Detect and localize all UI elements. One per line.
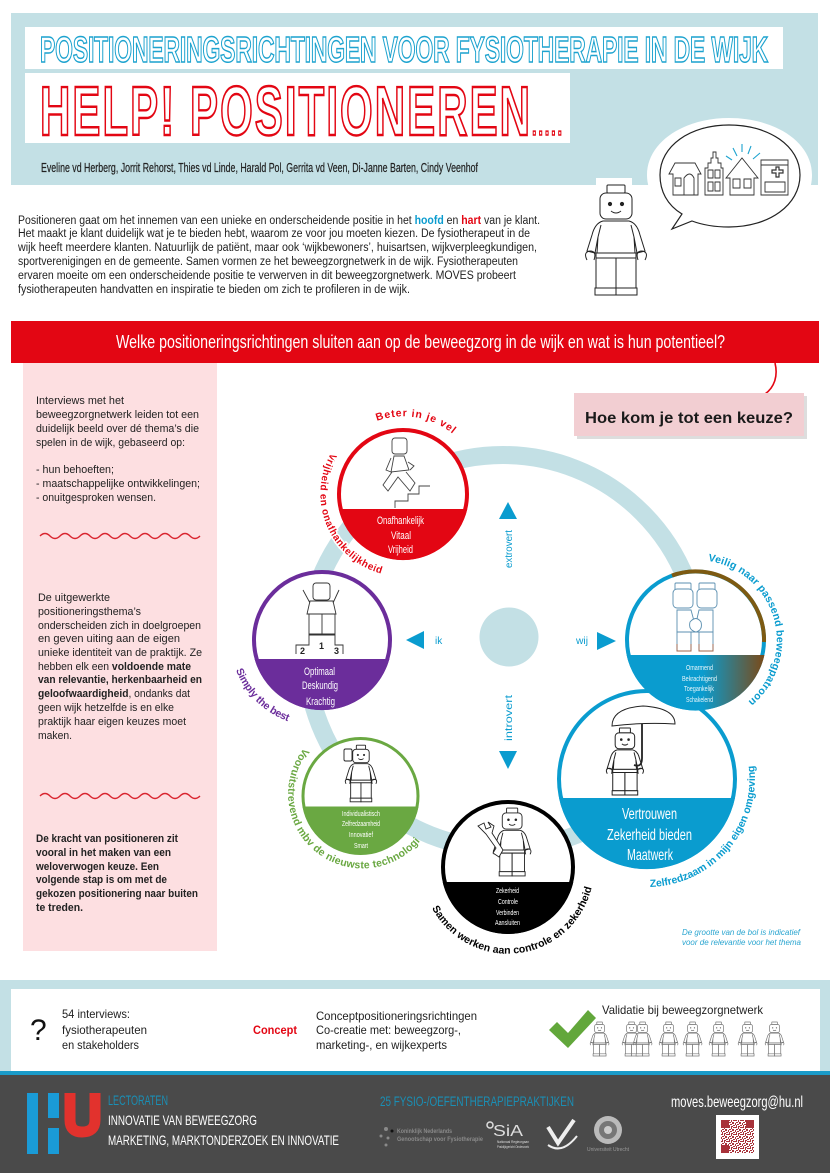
speech bubble with houses xyxy=(647,118,812,236)
header band xyxy=(11,13,818,185)
arrow: ik xyxy=(406,631,443,649)
text block: themes xyxy=(38,592,202,742)
theme circle: zelfredzaam: Maatwerk xyxy=(627,847,674,864)
text block: interviews: - hun behoeften; xyxy=(36,464,114,476)
lectoraten: MARKETING, MARKTONDERZOEK EN INNOVATIE xyxy=(108,1132,339,1148)
panel: left text xyxy=(23,363,217,951)
icon: figure on podium: 3 xyxy=(334,646,339,656)
text block: conclusion xyxy=(35,833,198,914)
theme circle: samen werken xyxy=(432,800,592,954)
theme circle: vooruitstrevend: Innovatief xyxy=(349,832,373,839)
text block: themes: onderscheiden zich in doelgroepen xyxy=(38,620,201,632)
logo: SIA: Nationaal Regieorgaan xyxy=(497,1139,529,1144)
theme circle: samen werken: Samen werken aan controle en zekerheid xyxy=(432,886,592,954)
logo: KNGF xyxy=(380,1127,484,1146)
theme circle: samen werken: Verbinden xyxy=(496,910,519,917)
theme circle: veilig: Omarmend xyxy=(686,665,713,672)
theme circle: samen werken: Controle xyxy=(498,899,518,906)
arrow: introvert xyxy=(499,695,517,769)
icon: figure with wrench xyxy=(478,808,531,876)
text block: themes: geloofwaardigheid, ondanks dat xyxy=(38,688,190,700)
icon: figure on podium xyxy=(296,583,343,656)
text block: themes: hebben elk een voldoende mate xyxy=(38,661,191,673)
partners xyxy=(380,1093,630,1153)
QR code xyxy=(716,1115,759,1159)
text block: themes: praktijk haar eigen keuzes moet xyxy=(38,716,186,728)
note: size legend: voor de relevantie voor het thema xyxy=(682,938,802,947)
theme circle: beter in je vel: Onafhankelijk xyxy=(377,515,424,527)
theme circle: simply the best xyxy=(236,570,392,722)
theme circle: zelfredzaam: Zelfredzaam in mijn eigen omgeving xyxy=(650,766,757,887)
step: concept: Co-creatie met: beweegzorg-, xyxy=(316,1023,461,1037)
arrow: ik: ik xyxy=(435,636,443,647)
icon: two figures xyxy=(673,583,717,651)
logo: UU xyxy=(587,1116,630,1153)
theme circle: zelfredzaam: Vertrouwen xyxy=(622,806,677,823)
text block: conclusion: volgende stap is om met de xyxy=(36,874,167,886)
theme circle: vooruitstrevend: Smart xyxy=(354,843,368,850)
step: interviews xyxy=(30,1007,147,1052)
text block: conclusion: De kracht van positioneren zit xyxy=(36,833,178,845)
logo: UU: Universiteit Utrecht xyxy=(587,1147,630,1153)
lectoraten: LECTORATEN xyxy=(108,1092,168,1108)
main title: HELP! POSITIONEREN..... xyxy=(40,73,562,151)
theme circle: veilig: Toegankelijk xyxy=(684,686,714,693)
text block: interviews: duidelijk beeld over dé thema’s die xyxy=(36,423,199,435)
intro text: fysiotherapeuten handvatten en inspiratie te bieden om zich te profileren in de wijk. xyxy=(18,284,410,296)
logo: SIA: Praktijkgericht Onderzoek xyxy=(497,1144,529,1149)
icon: figure with umbrella xyxy=(606,706,675,795)
authors: Eveline vd Herberg, Jorrit Rehorst, Thies vd Linde, Harald Pol, Gerrita vd Veen, Di-Janne Barten, Cindy Veenhof xyxy=(41,161,478,175)
arrow: introvert: introvert xyxy=(504,695,515,741)
step: interviews: 54 interviews: xyxy=(62,1007,130,1021)
step: interviews: fysiotherapeuten xyxy=(62,1023,147,1037)
theme circle: simply the best: Optimaal xyxy=(304,666,335,678)
text block: conclusion: weloverwogen keuze. Een xyxy=(35,861,159,873)
step: concept: Conceptpositioneringsrichtingen xyxy=(316,1009,477,1023)
lectoraten xyxy=(108,1092,339,1148)
text block: conclusion: te treden. xyxy=(36,902,83,914)
theme circle: simply the best: Krachtig xyxy=(306,696,335,708)
text block: themes: maken. xyxy=(38,730,72,742)
text block: themes: De uitgewerkte xyxy=(38,592,110,604)
theme circle: vooruitstrevend: Zelfredzaamheid xyxy=(342,821,380,828)
intro text: Positioneren gaat om het innemen van een unieke en onderscheidende positie in het hoofd en hart van je klant. xyxy=(18,215,540,227)
text block: themes: geen wijk hetzelfde is en elke xyxy=(38,702,174,714)
logo: HU xyxy=(27,1093,95,1154)
step: concept xyxy=(253,1009,477,1052)
theme circle: zelfredzaam xyxy=(557,689,757,887)
logo: KNGF: Genootschap voor Fysiotherapie xyxy=(397,1137,484,1143)
text block: interviews: - maatschappelijke ontwikkelingen; xyxy=(36,478,200,490)
logo: SIA xyxy=(487,1122,529,1149)
text block: interviews xyxy=(36,395,200,504)
step: validatie xyxy=(549,1003,784,1056)
note: size legend xyxy=(682,928,802,947)
intro text: Het maakt je klant duidelijk wat je te bieden hebt, waarom ze voor jou moeten kiezen. De fysiotherapeut in de xyxy=(18,228,530,240)
text block: interviews: - onuitgesproken wensen. xyxy=(36,492,156,504)
theme circle: samen werken: Zekerheid xyxy=(496,888,519,895)
step: interviews: en stakeholders xyxy=(62,1038,139,1052)
intro text: ervaren moeite om een onderscheidende positie te verwerven in dit beweegzorgnetwerk. MOVES probeert xyxy=(18,270,517,282)
red question banner xyxy=(11,321,819,363)
arrow: extrovert xyxy=(499,502,517,568)
theme circle: beter in je vel: Beter in je vel xyxy=(375,409,457,434)
arrow: extrovert: extrovert xyxy=(504,530,515,568)
intro text: sportverenigingen en de gemeente. Samen vormen ze het beweegzorgnetwerk in de wijk. Fysiotherapeuten xyxy=(18,256,518,268)
theme circle: simply the best: Deskundig xyxy=(302,680,338,692)
step: validatie: Validatie bij beweegzorgnetwerk xyxy=(602,1003,764,1017)
note: size legend: De grootte van de bol is indicatief xyxy=(682,928,801,937)
text block: conclusion: vooral in het maken van een xyxy=(36,847,171,859)
intro text: wijk heeft meerdere klanten. Natuurlijk de patiënt, maar ook ‘wijkbewoners’, huisartsen, wijkverpleegkundigen, xyxy=(17,242,537,254)
intro text xyxy=(17,215,540,296)
step: interviews: ? xyxy=(30,1014,47,1047)
theme circle: veilig: Bekrachtigend xyxy=(682,676,717,683)
theme circle: zelfredzaam: Zekerheid bieden xyxy=(607,827,692,844)
icon: figure on podium: 1 xyxy=(319,641,324,651)
callout: hoe kom je tot een keuze: Hoe kom je tot een keuze? xyxy=(585,410,793,427)
logo: KNGF: Koninklijk Nederlands xyxy=(397,1129,453,1135)
theme circle: samen werken: Aansluiten xyxy=(495,920,520,927)
text block: themes: unieke identiteit van de praktijk. Ze xyxy=(38,647,202,659)
diagram ring xyxy=(306,455,700,849)
step: concept: Concept xyxy=(253,1025,297,1037)
theme circle: beter in je vel: Vitaal xyxy=(391,530,411,542)
step: concept: marketing-, en wijkexperts xyxy=(316,1038,447,1052)
text block: conclusion: gekozen positionering naar buiten xyxy=(36,888,198,900)
arrow: wij xyxy=(575,632,616,650)
logo: check xyxy=(548,1120,577,1148)
text block: interviews: beweegzorgnetwerk leiden tot een xyxy=(36,409,199,421)
theme circle: beter in je vel: Vrijheid en onafhankelijkheid xyxy=(320,455,383,574)
theme circle: veilig: Veilig naar passend beweegpatroon xyxy=(709,554,784,705)
subtitle: POSITIONERINGSRICHTINGEN VOOR FYSIOTHERAPIE IN DE WIJK xyxy=(40,31,768,70)
text block: themes: positioneringsthema’s xyxy=(38,606,141,618)
text block: themes: en geven uiting aan de eigen xyxy=(38,633,180,645)
arrow: wij: wij xyxy=(575,636,588,647)
text block: themes: van relevantie, herkenbaarheid en xyxy=(38,674,202,686)
text block: interviews: spelen in de wijk, gebaseerd op: xyxy=(36,437,185,449)
theme circle: vooruitstrevend xyxy=(288,737,420,868)
theme circle: veilig xyxy=(625,554,784,711)
icon: houses xyxy=(669,144,788,195)
logo: SIA: SiA xyxy=(493,1123,523,1140)
footer xyxy=(0,1071,830,1173)
lectoraten: INNOVATIE VAN BEWEEGZORG xyxy=(108,1112,257,1128)
icon: lego figure xyxy=(586,178,646,295)
callout: hoe kom je tot een keuze xyxy=(574,363,807,439)
theme circle: vooruitstrevend: Vooruitstrevend mbv de nieuwste technologie xyxy=(288,750,420,868)
partners: 25 FYSIO-/OEFENTHERAPIEPRAKTIJKEN xyxy=(380,1093,574,1109)
icon: figure with phone xyxy=(344,745,377,802)
theme circle: vooruitstrevend: Individualistisch xyxy=(342,811,380,818)
panel: process strip xyxy=(0,980,830,1073)
theme circle: beter in je vel xyxy=(320,409,469,574)
theme circle: beter in je vel: Vrijheid xyxy=(388,544,413,556)
icon: figure on podium: 2 xyxy=(300,646,305,656)
theme circle: simply the best: Simply the best xyxy=(236,668,290,722)
theme circle: veilig: Schakelend xyxy=(686,697,713,704)
text block: interviews: Interviews met het xyxy=(36,395,124,407)
icon: figure climbing stairs xyxy=(383,438,430,508)
